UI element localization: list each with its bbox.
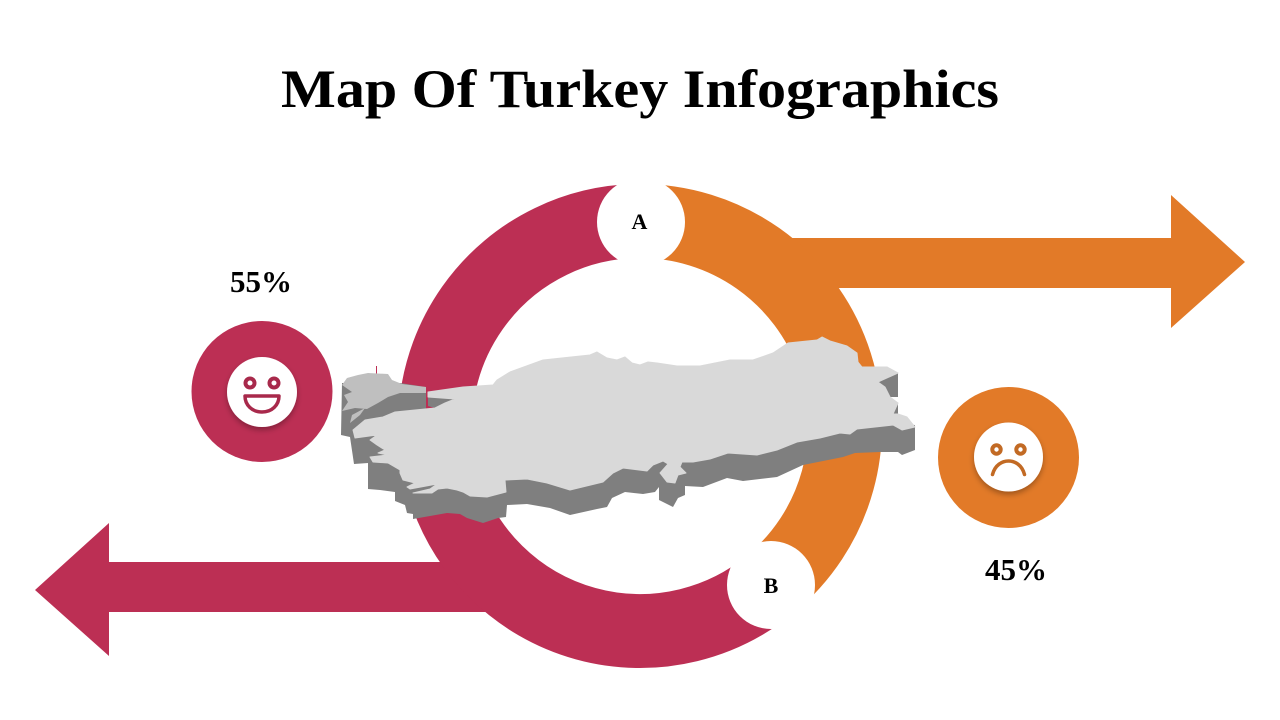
ring segment: crimson xyxy=(435,221,770,631)
node A xyxy=(597,178,685,266)
stat: 45%: 45% xyxy=(985,552,1047,587)
map: Anatolia surface xyxy=(353,337,915,497)
map: shadow east notch xyxy=(878,373,898,397)
title: Map Of Turkey Infographics xyxy=(281,59,999,119)
node B: B xyxy=(764,573,779,598)
stat: 55%: 55% xyxy=(230,264,292,299)
map: shadow Marmara strait xyxy=(428,397,455,408)
map: Marmara sliver xyxy=(350,408,365,423)
icon: happy face badge xyxy=(192,321,332,462)
map of Turkey xyxy=(341,337,915,523)
arrow: crimson pointing left xyxy=(35,523,490,656)
ring segment: orange xyxy=(640,221,845,584)
map: extruded shadow xyxy=(341,383,915,523)
node B xyxy=(727,541,815,629)
map: Thrace region xyxy=(342,373,426,411)
arrow: orange pointing right xyxy=(785,195,1245,328)
map: shadow east sliver xyxy=(892,403,898,414)
node A: A xyxy=(632,209,648,234)
icon: sad face badge xyxy=(938,387,1079,528)
